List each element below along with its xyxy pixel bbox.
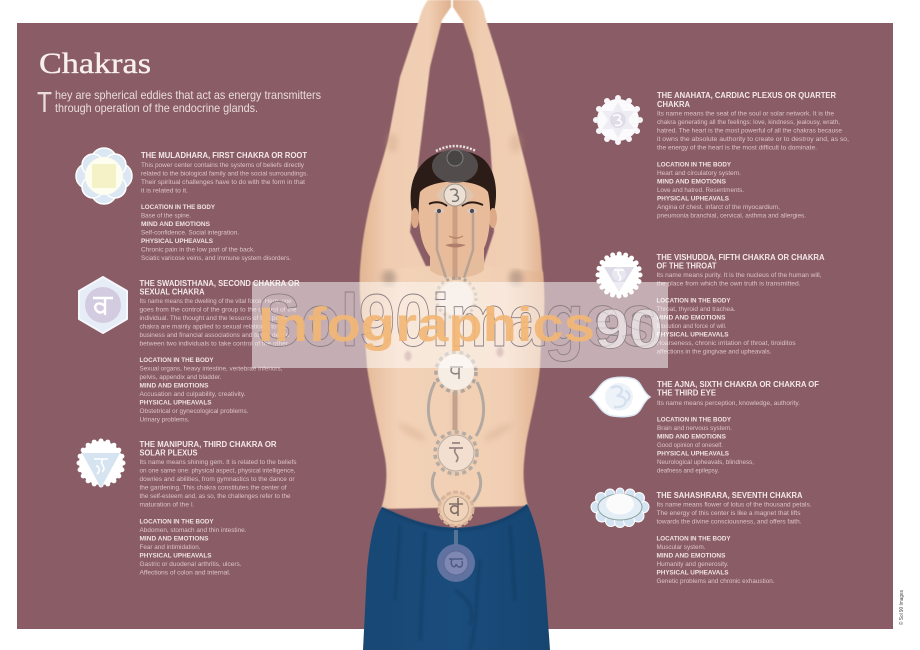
intro text bbox=[37, 87, 321, 119]
text: Anahata: Love and hatred. Resentments. bbox=[657, 187, 744, 194]
text: Vishuddha: Elocution and force of will. bbox=[656, 323, 727, 330]
text: Vishuddha: the place from which the own truth is transmitted. bbox=[656, 280, 801, 288]
overlay: sacral chakra bbox=[439, 492, 473, 526]
text: Sahashrara: Humanity and generosity. bbox=[656, 561, 729, 568]
text: Ajna: Good opinion of oneself. bbox=[657, 442, 723, 449]
text: Manipura: Affections of colon and internal. bbox=[140, 570, 231, 576]
nipples bbox=[404, 347, 504, 361]
text: Swadisthana: Its name means the dwelling of the vital force. Here, one bbox=[140, 298, 292, 305]
torso bbox=[361, 266, 543, 509]
text: Anahata: CHAKRA bbox=[657, 100, 690, 109]
text: Anahata: LOCATION IN THE BODY bbox=[657, 162, 732, 168]
text: Sahashrara: LOCATION IN THE BODY bbox=[656, 536, 731, 542]
navel bbox=[454, 459, 460, 467]
text: Anahata: PHYSICAL UPHEAVALS bbox=[657, 196, 730, 202]
text: Muladhara: PHYSICAL UPHEAVALS bbox=[141, 238, 214, 245]
text: Vishuddha: THE VISHUDDA, FIFTH CHAKRA OR CHAKRA bbox=[656, 253, 825, 262]
text: Anahata: hatred. The heart is the most powerful of all the chakras because bbox=[657, 128, 842, 134]
icon: Muladhara lotus bbox=[76, 148, 132, 204]
text: Manipura: MIND AND EMOTIONS bbox=[140, 536, 209, 542]
text: Muladhara: LOCATION IN THE BODY bbox=[141, 204, 216, 211]
text: Muladhara: related to the biological family and the social surroundings. bbox=[141, 170, 308, 178]
text: Manipura: maturation of the I. bbox=[140, 502, 195, 508]
text: Vishuddha: OF THE THROAT bbox=[656, 262, 717, 270]
pants bbox=[363, 504, 550, 650]
text: Ajna: THE AJNA, SIXTH CHAKRA OR CHAKRA OF bbox=[657, 380, 819, 389]
icon: Manipura lotus bbox=[79, 441, 123, 488]
icon: Ajna lotus bbox=[590, 377, 650, 417]
watermark: 90 bbox=[595, 297, 663, 360]
text: Ajna bbox=[657, 380, 819, 474]
ears bbox=[411, 208, 497, 228]
text: Sahashrara: MIND AND EMOTIONS bbox=[656, 552, 726, 560]
text: Vishuddha: LOCATION IN THE BODY bbox=[656, 298, 731, 304]
text: Ajna: Neurological upheavals, blindness, bbox=[657, 459, 754, 466]
text: Anahata: the energy of the heart is the most difficult to dominate. bbox=[657, 144, 817, 152]
text: Vishuddha: Hoarseness, chronic irritation of throat, tiroiditos bbox=[656, 340, 796, 347]
hair bbox=[411, 150, 496, 215]
text: Vishuddha: affections in the gingivae and upheavals. bbox=[656, 348, 772, 356]
text: Vishuddha: PHYSICAL UPHEAVALS bbox=[656, 332, 729, 338]
icon: Swadisthana lotus bbox=[79, 277, 127, 333]
body shading bbox=[386, 133, 522, 475]
intro text: T bbox=[37, 87, 52, 119]
facial features bbox=[429, 202, 483, 248]
text: Swadisthana: between two individuals to take control of the other. bbox=[140, 340, 290, 348]
title: Chakras bbox=[39, 47, 151, 80]
text: Manipura: PHYSICAL UPHEAVALS bbox=[140, 552, 212, 560]
text: Anahata: THE ANAHATA, CARDIAC PLEXUS OR QUARTER bbox=[657, 91, 836, 100]
left arm bbox=[360, 0, 451, 320]
overlay: third eye chakra bbox=[436, 184, 474, 206]
text: Muladhara bbox=[141, 151, 308, 262]
text: Sahashrara: PHYSICAL UPHEAVALS bbox=[656, 570, 729, 576]
text: Sahashrara: THE SAHASHRARA, SEVENTH CHAKRA bbox=[656, 491, 803, 500]
text: Swadisthana: PHYSICAL UPHEAVALS bbox=[140, 400, 212, 406]
pants folds bbox=[382, 506, 527, 650]
overlay: root chakra bbox=[437, 544, 475, 582]
text: Ajna: THE THIRD EYE bbox=[657, 388, 717, 398]
text: Manipura: on one same one: physical aspect, physical intelligence, bbox=[140, 468, 296, 474]
text: Vishuddha: Its name means purity. It is the nucleus of the human will, bbox=[656, 272, 822, 279]
text: Muladhara: Their spiritual challenges have to do with the form in that bbox=[141, 179, 305, 186]
overlay: throat chakra bbox=[436, 278, 476, 318]
text: Muladhara: MIND AND EMOTIONS bbox=[141, 221, 211, 228]
text: Swadisthana: THE SWADISTHANA, SECOND CHAKRA OR bbox=[140, 279, 300, 288]
text: Manipura: Gastric or duodenal arthritis, ulcers. bbox=[140, 561, 242, 568]
text: Anahata bbox=[657, 91, 849, 220]
text: Manipura: LOCATION IN THE BODY bbox=[140, 518, 214, 526]
overlay: channels from head to throat bbox=[437, 206, 473, 280]
text: Sahashrara: towards the divine consciousness, and offers faith. bbox=[656, 518, 802, 526]
text: Muladhara: THE MULADHARA, FIRST CHAKRA OR ROOT bbox=[141, 151, 307, 160]
text: Swadisthana: pelvis, appendix and bladder. bbox=[140, 374, 222, 381]
text: Anahata: pneumonia branchial, cervical, asthma and allergies. bbox=[657, 212, 806, 220]
text: Swadisthana: LOCATION IN THE BODY bbox=[140, 357, 214, 364]
text: Swadisthana: business and financial associations and to the desire bbox=[140, 332, 290, 339]
text: Ajna: Brain and nervous system. bbox=[657, 425, 732, 432]
text: Sahashrara: Muscular system. bbox=[656, 544, 706, 551]
text: Sahashrara: The energy of this center is like a magnet that lifts bbox=[656, 510, 800, 517]
text: Muladhara: it is related to it. bbox=[141, 188, 188, 194]
text: Anahata: MIND AND EMOTIONS bbox=[657, 178, 727, 186]
text: Swadisthana: goes from the control of the group to the control of the bbox=[140, 306, 297, 314]
figure: man with raised arms bbox=[360, 0, 550, 650]
icon: Vishuddha lotus bbox=[598, 254, 640, 296]
text: Manipura: the gardening. This chakra constitutes the center of bbox=[140, 484, 287, 492]
text: Swadisthana: Obstetrical or gynecological problems. bbox=[140, 408, 249, 415]
text: Swadisthana bbox=[140, 279, 300, 424]
text: Ajna: Its name means perception, knowledge, authority. bbox=[657, 400, 800, 407]
armpit hair bbox=[382, 270, 523, 286]
watermark: Sol90images bbox=[257, 279, 657, 362]
text: Muladhara: Sciatic varicose veins, and immune system disorders. bbox=[141, 255, 291, 262]
text: Swadisthana: MIND AND EMOTIONS bbox=[140, 382, 209, 390]
text: Manipura: SOLAR PLEXUS bbox=[140, 448, 198, 458]
text: Muladhara: Chronic pain in the low part of the back. bbox=[141, 246, 255, 254]
text: Manipura: dowries and abilities, from gymnastics to the dance or bbox=[140, 476, 295, 483]
icon: Anahata lotus bbox=[596, 98, 640, 142]
right arm bbox=[453, 0, 544, 320]
text: Swadisthana: Urinary problems. bbox=[140, 416, 190, 424]
text: Vishuddha bbox=[656, 253, 825, 356]
text: Manipura: THE MANIPURA, THIRD CHAKRA OR bbox=[140, 440, 277, 449]
text: Vishuddha: Throat, thyroid and trachea. bbox=[656, 306, 736, 313]
text: Manipura bbox=[140, 440, 296, 576]
text: Muladhara: Self-confidence. Social integration. bbox=[141, 230, 239, 236]
text: Manipura: the self-esteem and, as so, the challenges refer to the bbox=[140, 493, 291, 500]
text: Manipura: Abdomen, stomach and thin intestine. bbox=[140, 527, 247, 534]
watermark: Infographics bbox=[258, 299, 595, 352]
text: Swadisthana: chakra are mainly applied to sexual relations, to the bbox=[140, 324, 288, 330]
text: Muladhara: This power center contains the systems of beliefs directly bbox=[141, 162, 305, 169]
text: Anahata: it owns the absolute authority to create or to destroy and, as so, bbox=[657, 136, 849, 143]
text: Sahashrara bbox=[656, 491, 812, 585]
text: Swadisthana: Accusation and culpability, creativity. bbox=[140, 391, 246, 398]
text: Manipura: Fear and intimidation. bbox=[140, 544, 201, 551]
neck bbox=[430, 245, 484, 278]
text: Swadisthana: individual. The thought and the lessons of this power bbox=[140, 315, 290, 322]
text: Swadisthana: SEXUAL CHAKRA bbox=[140, 288, 205, 296]
text: Sahashrara: Genetic problems and chronic exhaustion. bbox=[656, 578, 775, 585]
text: Anahata: Angina of chest, infarct of the myocardium, bbox=[657, 204, 780, 211]
icon: Sahashrara lotus bbox=[591, 488, 649, 528]
overlay: heart chakra bbox=[436, 352, 476, 392]
text: Ajna: PHYSICAL UPHEAVALS bbox=[657, 450, 730, 458]
face bbox=[419, 182, 490, 270]
text: Ajna: MIND AND EMOTIONS bbox=[657, 434, 727, 440]
overlay: solar plexus chakra bbox=[435, 432, 477, 474]
overlay: crown chakra bbox=[432, 146, 478, 183]
text: Ajna: LOCATION IN THE BODY bbox=[657, 416, 732, 424]
text: Sahashrara: Its name means flower of lotus of the thousand petals. bbox=[656, 502, 812, 508]
text: Vishuddha: MIND AND EMOTIONS bbox=[656, 314, 726, 322]
text: Anahata: Heart and circulatory system. bbox=[657, 170, 741, 177]
text: Anahata: Its name means the seat of the soul or solar network. It is the bbox=[657, 110, 834, 118]
text: Anahata: chakra generating all the feelings: love, kindness, jealousy, wrath, bbox=[657, 119, 840, 126]
copyright credit: © Sol 90 Images bbox=[898, 590, 905, 625]
overlay: channels along the spine bbox=[428, 382, 484, 545]
text: Manipura: Its name means shining gem. It is related to the beliefs bbox=[140, 459, 296, 466]
text: Ajna: deafness and epilepsy. bbox=[657, 468, 719, 474]
text: Muladhara: Base of the spine. bbox=[141, 212, 191, 220]
intro text: hey are spherical eddies that act as energy transmitters bbox=[55, 88, 321, 102]
text: Swadisthana: Sexual organs, heavy intestine, vertebrae inferiors, bbox=[140, 366, 283, 372]
intro text: through operation of the endocrine glands. bbox=[55, 101, 258, 115]
